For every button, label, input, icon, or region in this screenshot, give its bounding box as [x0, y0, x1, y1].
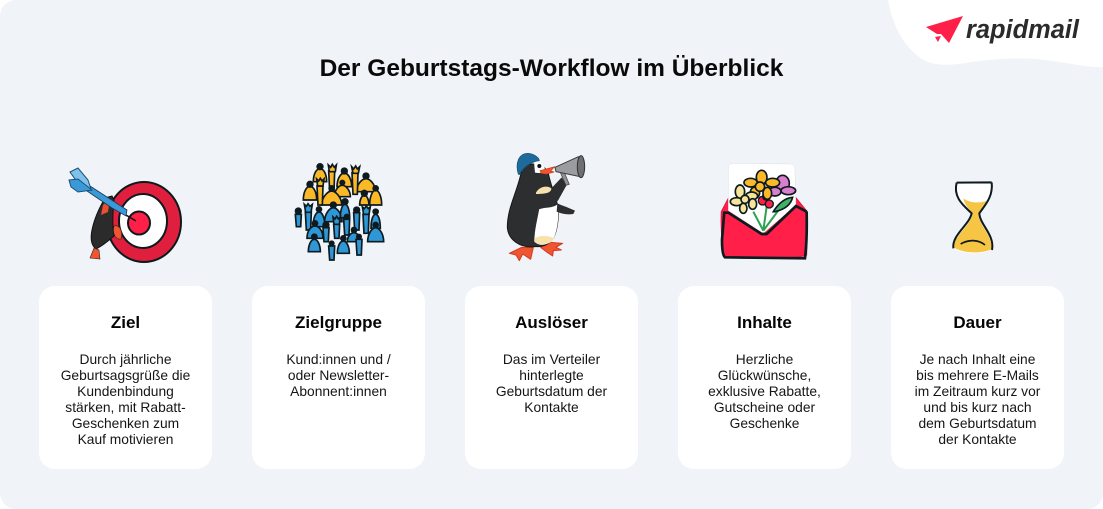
text: Dauer description: bis mehrere E-Mails [916, 368, 1039, 382]
text: Dauer description: dem Geburtsdatum [918, 416, 1037, 430]
text: Dauer description: im Zeitraum kurz vor [915, 384, 1040, 398]
text: Ziel description: Geschenken zum [72, 416, 179, 430]
text: Inhalte description: Gutscheine oder [714, 400, 815, 414]
text: Dauer description: der Kontakte [938, 432, 1017, 446]
heading: Auslöser: Auslöser [515, 312, 588, 332]
text: Inhalte description: exklusive Rabatte, [708, 384, 821, 398]
text: Zielgruppe description: Abonnent:innen [290, 384, 387, 398]
heading: Ziel: Ziel [111, 312, 140, 332]
text: Ziel description: stärken, mit Rabatt- [65, 400, 186, 414]
text: Zielgruppe description: Kund:innen und / [286, 352, 391, 366]
panel: Auslöser [465, 286, 638, 469]
text: Auslöser description: Das im Verteiler [503, 352, 600, 366]
heading: Inhalte: Inhalte [737, 312, 792, 332]
logo paper plane icon [926, 16, 963, 43]
panel: Inhalte [678, 286, 851, 469]
text: Ziel description: Geburtsagsgrüße die [61, 368, 190, 382]
panel: Ziel [39, 286, 212, 469]
panel: Dauer [891, 286, 1064, 469]
text: Auslöser description: Geburtsdatum der [496, 384, 607, 398]
title: Der Geburtstags-Workflow im Überblick [320, 55, 783, 82]
text: Dauer description [915, 352, 1040, 446]
text: Inhalte description [708, 352, 821, 430]
heading: Zielgruppe: Zielgruppe [295, 312, 382, 332]
logo wordmark: rapidmail [966, 16, 1080, 44]
text: Dauer description: und bis kurz nach [923, 400, 1032, 414]
text: Inhalte description: Herzliche [736, 352, 793, 366]
text: Auslöser description: hinterlegte [519, 368, 584, 382]
text: Auslöser description [496, 352, 607, 414]
text: Ziel description: Kundenbindung [77, 384, 174, 398]
text: Auslöser description: Kontakte [524, 400, 579, 414]
text: Zielgruppe description: oder Newsletter- [288, 368, 389, 382]
text: Inhalte description: Glückwünsche, [718, 368, 811, 382]
heading: Dauer: Dauer [953, 312, 1002, 332]
text: Dauer description: Je nach Inhalt eine [920, 352, 1035, 366]
text: Ziel description: Durch jährliche [79, 352, 172, 366]
logo: rapidmail [926, 16, 1080, 44]
text: Ziel description [61, 352, 190, 446]
text: Ziel description: Kauf motivieren [78, 432, 173, 446]
text: Zielgruppe description [286, 352, 391, 398]
logo blob [888, 0, 1103, 67]
panel: Zielgruppe [252, 286, 425, 469]
text: Inhalte description: Geschenke [730, 416, 799, 430]
